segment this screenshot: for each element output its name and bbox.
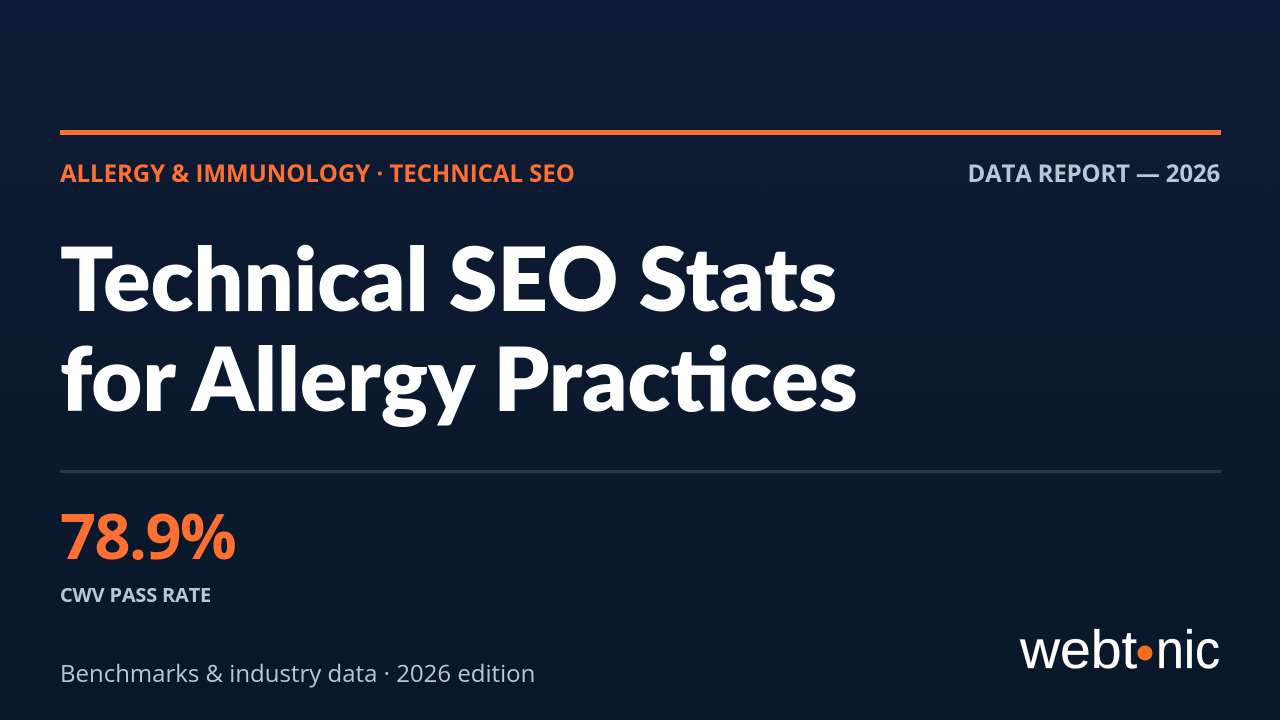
stat value: 78.9% <box>60 493 235 578</box>
eyebrow: report label: DATA REPORT — 2026 <box>967 157 1220 190</box>
logo: webtonic: webt <box>1019 620 1137 680</box>
logo: webtonic <box>1019 620 1220 680</box>
divider <box>60 470 1221 473</box>
accent rule <box>60 130 1221 135</box>
title <box>60 224 858 430</box>
eyebrow: category label: ALLERGY & IMMUNOLOGY · TECHNICAL SEO <box>60 157 575 190</box>
footer note: Benchmarks & industry data · 2026 edition <box>60 657 535 690</box>
title: for Allergy Practices <box>60 324 858 430</box>
logo: webtonic: nic <box>1156 620 1220 680</box>
title: Technical SEO Stats <box>60 224 837 330</box>
stat label: CWV PASS RATE <box>60 581 211 608</box>
